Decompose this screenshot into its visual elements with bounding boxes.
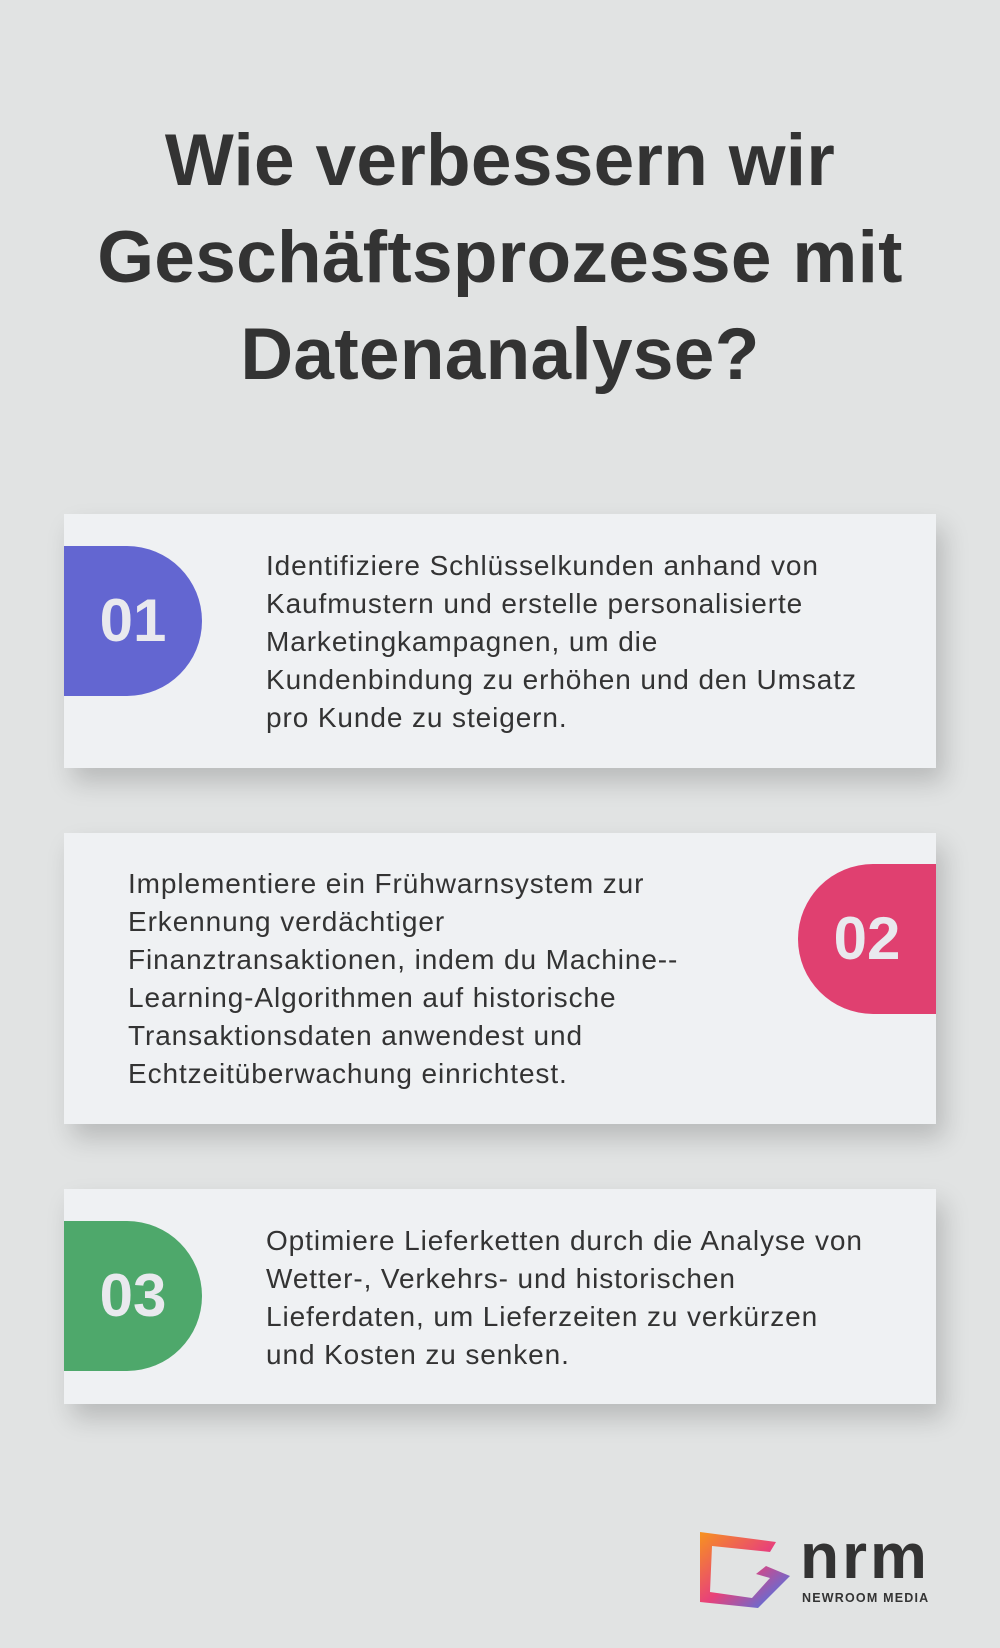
text 03: Lieferdaten, um Lieferzeiten zu verkürzen <box>266 1301 818 1332</box>
icon: logo mark <box>700 1532 790 1608</box>
text 01: Marketingkampagnen, um die <box>266 626 658 657</box>
text 01: Kundenbindung zu erhöhen und den Umsatz <box>266 664 857 695</box>
title: Datenanalyse? <box>240 314 760 395</box>
panel: step 01 <box>64 514 936 768</box>
text 03: und Kosten zu senken. <box>266 1339 570 1370</box>
logo <box>700 1520 930 1608</box>
text 03 <box>266 1225 863 1370</box>
badge 01 <box>64 546 202 696</box>
badge 02: 02 <box>834 905 900 972</box>
title <box>97 120 903 395</box>
text 03: Wetter-, Verkehrs- und historischen <box>266 1263 736 1294</box>
title: Wie verbessern wir <box>165 120 835 201</box>
text 02: Echtzeitüberwachung einrichtest. <box>128 1058 568 1089</box>
badge 02 <box>798 864 936 1014</box>
logo: NEWROOM MEDIA <box>802 1591 929 1605</box>
title: Geschäftsprozesse mit <box>97 217 903 298</box>
text 01 <box>266 550 857 733</box>
panel: step 02 <box>64 833 936 1124</box>
text 01: pro Kunde zu steigern. <box>266 702 568 733</box>
badge 03: 03 <box>100 1262 166 1329</box>
text 02: Implementiere ein Frühwarnsystem zur <box>128 868 644 899</box>
text 01: Kaufmustern und erstelle personalisierte <box>266 588 803 619</box>
text 03: Optimiere Lieferketten durch die Analyse von <box>266 1225 863 1256</box>
badge 03 <box>64 1221 202 1371</box>
text 02: Finanztransaktionen, indem du Machine-- <box>128 944 678 975</box>
badge 01: 01 <box>100 587 166 654</box>
text 01: Identifiziere Schlüsselkunden anhand von <box>266 550 819 581</box>
text 02: Erkennung verdächtiger <box>128 906 445 937</box>
text 02: Learning-Algorithmen auf historische <box>128 982 616 1013</box>
logo text: nrm <box>800 1520 930 1592</box>
panel: step 03 <box>64 1189 936 1404</box>
text 02: Transaktionsdaten anwendest und <box>128 1020 583 1051</box>
text 02 <box>128 868 678 1089</box>
